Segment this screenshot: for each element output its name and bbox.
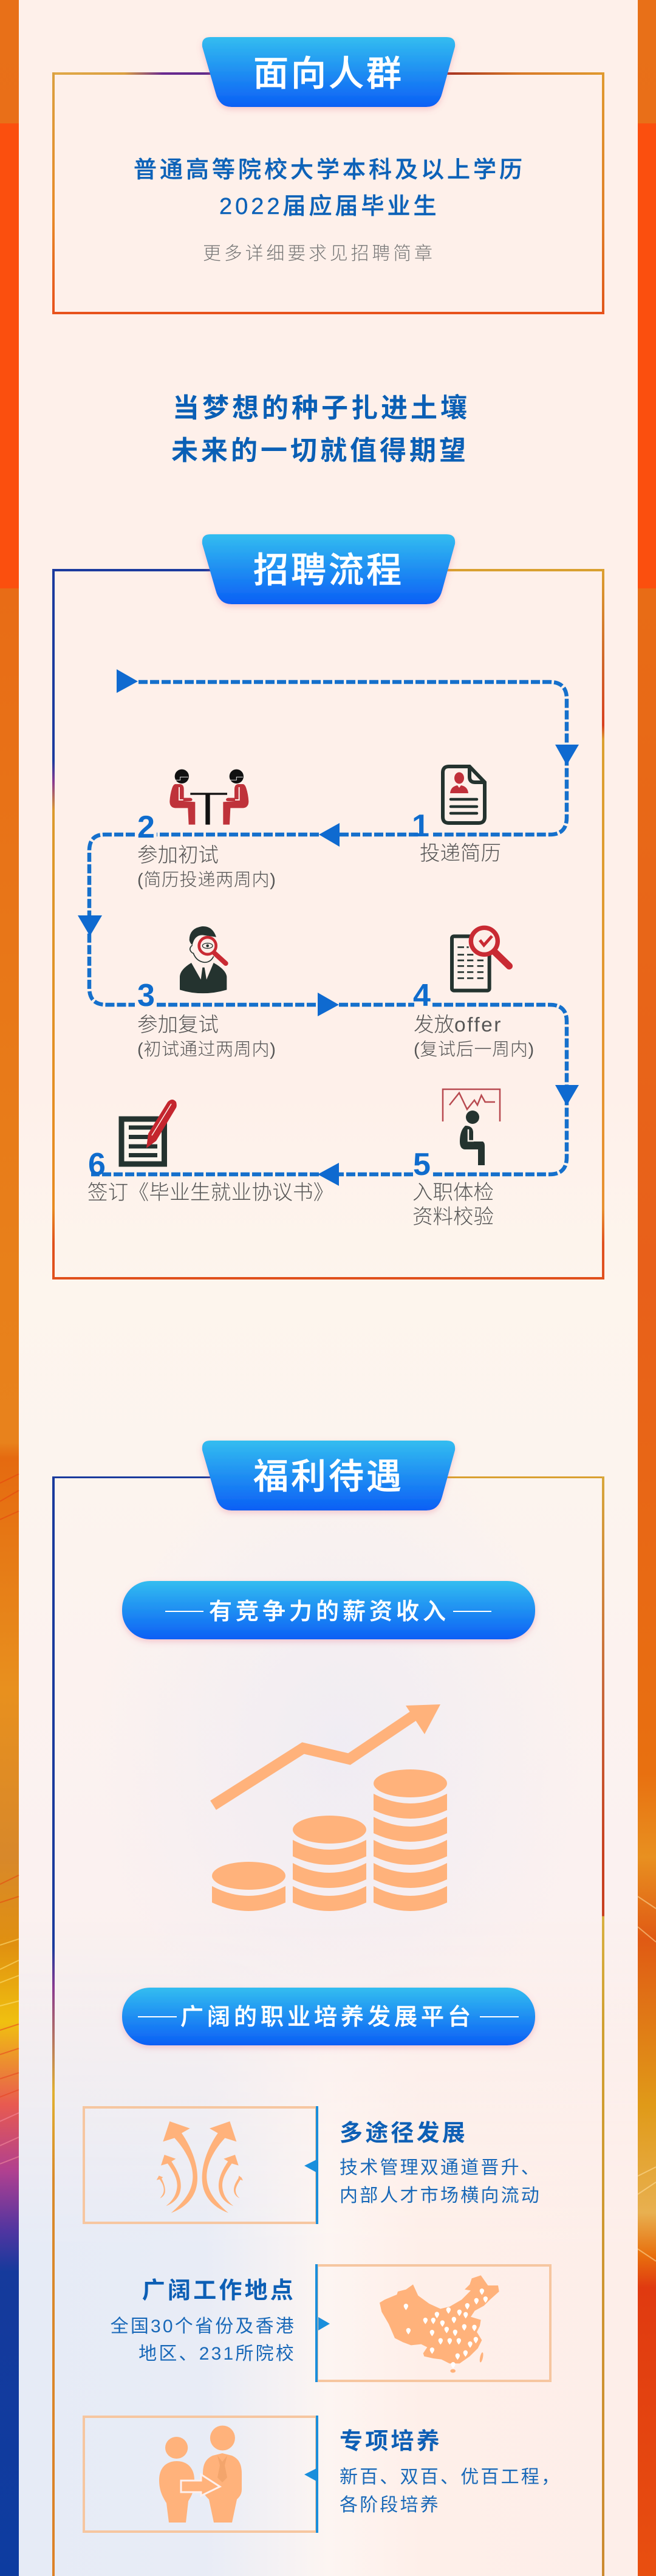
icon: contract and pencil: [121, 1100, 177, 1164]
item: work locations: 地区、231所院校: [138, 2344, 296, 2364]
flow arrows: [78, 669, 579, 1186]
heading badge: 面向人群: 面向人群: [253, 54, 404, 94]
step 3: second interview: (初试通过两周内): [137, 1039, 276, 1059]
step 3: second interview: 3: [137, 978, 155, 1013]
icon: resume document: [443, 766, 485, 823]
icon: document under magnifier: [452, 928, 509, 991]
pill heading: career platform: 广阔的职业培养发展平台: [180, 2005, 474, 2030]
step 5: health check: 入职体检: [412, 1182, 494, 1204]
heading badge: 招聘流程: 招聘流程: [253, 551, 404, 590]
step 2: first interview: 2: [137, 810, 155, 845]
image frame: [84, 2416, 318, 2533]
item: multiple development paths: 内部人才市场横向流动: [340, 2186, 541, 2206]
step 4: offer: [413, 928, 535, 1059]
step 3: second interview: 参加复试: [137, 1014, 219, 1036]
step 2: first interview: (简历投递两周内): [137, 870, 276, 890]
pill heading: salary: [122, 1581, 535, 1639]
step 5: health check: 5: [413, 1147, 431, 1182]
icon: seated person with ECG monitor: [443, 1089, 500, 1165]
step 3: second interview: [137, 926, 276, 1059]
heading badge: 面向人群: [202, 37, 455, 107]
step 6: sign agreement: 签订《毕业生就业协议书》: [87, 1182, 334, 1204]
image frame: [84, 2106, 318, 2224]
item: work locations: 广阔工作地点: [142, 2278, 296, 2304]
step 5: health check: [412, 1089, 500, 1228]
item: special training: 新百、双百、优百工程，: [340, 2467, 561, 2487]
item: multiple development paths: 多途径发展: [340, 2121, 468, 2146]
step 6: sign agreement: [87, 1100, 334, 1204]
item: work locations: 全国30个省份及香港: [111, 2316, 296, 2337]
step 4: offer: (复试后一周内): [414, 1039, 535, 1059]
panel: target audience: [52, 37, 604, 314]
panel frame: [52, 1476, 604, 2576]
icon: China map with pins: [380, 2275, 499, 2373]
item: special training: 各阶段培养: [340, 2495, 440, 2515]
icon: interview at table: [169, 770, 248, 825]
item: work locations: [111, 2264, 550, 2382]
step 1: submit resume: 投递简历: [420, 842, 501, 865]
step 4: offer: 发放offer: [414, 1014, 502, 1036]
icon: rising arrows: [157, 2121, 243, 2213]
audience text: 更多详细要求见招聘简章: [203, 244, 436, 264]
icon: interviewer with magnifier: [180, 926, 227, 993]
audience text: 2022届应届毕业生: [219, 194, 440, 219]
slogan: 当梦想的种子扎进土壤: [173, 393, 470, 423]
item: special training: 专项培养: [340, 2429, 442, 2454]
heading badge: 福利待遇: 福利待遇: [253, 1457, 404, 1496]
panel frame: [52, 72, 604, 314]
pill heading: salary: 有竞争力的薪资收入: [209, 1599, 449, 1625]
slogan: [171, 393, 470, 466]
icon: coin stacks with rising arrow: [212, 1704, 447, 1911]
heading badge: 招聘流程: [202, 534, 455, 604]
step 1: submit resume: [412, 766, 501, 865]
icon: two people with arrow: [159, 2425, 242, 2523]
heading badge: 福利待遇: [202, 1441, 455, 1510]
audience text: 普通高等院校大学本科及以上学历: [134, 157, 525, 183]
step 6: sign agreement: 6: [88, 1147, 106, 1182]
image frame: [315, 2264, 550, 2382]
step 1: submit resume: 1: [412, 808, 429, 844]
audience text: [134, 157, 525, 264]
step 4: offer: 4: [413, 978, 431, 1013]
step 5: health check: 资料校验: [412, 1206, 494, 1228]
item: multiple development paths: [84, 2106, 541, 2224]
item: multiple development paths: 技术管理双通道晋升、: [340, 2158, 541, 2178]
right side strip: [638, 0, 656, 2576]
left side strip: [0, 0, 19, 2576]
step 2: first interview: 参加初试: [137, 844, 219, 867]
dashed flow path: [89, 682, 567, 1174]
step 2: first interview: [137, 770, 276, 890]
panel frame: [52, 569, 604, 1279]
pill heading: career platform: [122, 1988, 535, 2045]
panel: recruitment process: [52, 534, 604, 1279]
item: special training: [84, 2416, 561, 2533]
slogan: 未来的一切就值得期望: [171, 436, 469, 466]
panel: benefits: [52, 1441, 604, 2576]
page background: [19, 1578, 474, 2576]
